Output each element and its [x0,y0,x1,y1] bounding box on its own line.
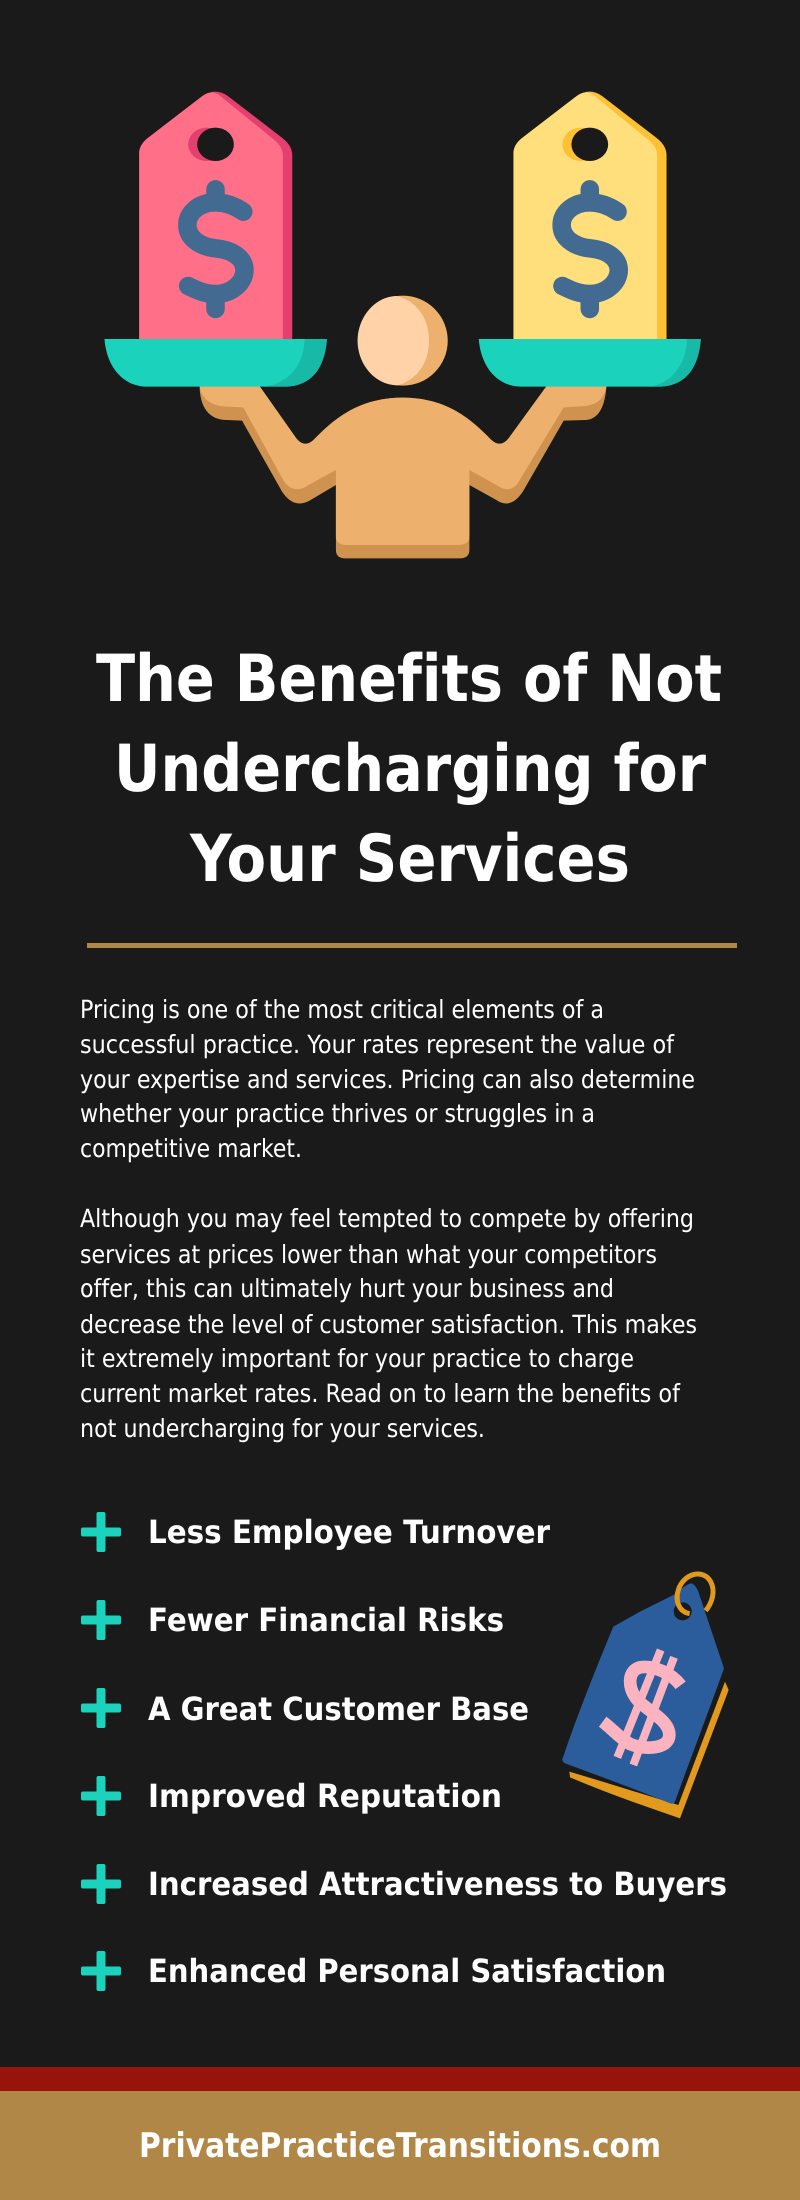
intro paragraph 2: services at prices lower than what your competitors [80,1240,657,1269]
intro paragraph 1: successful practice. Your rates represent the value of [80,1030,675,1059]
person: body and arms [200,385,607,558]
intro paragraph 1: competitive market. [80,1134,302,1163]
intro paragraph 2: offer, this can ultimately hurt your business and [80,1274,614,1303]
intro paragraph 1: Pricing is one of the most critical elements of a [80,995,604,1024]
intro paragraph 2: not undercharging for your services. [80,1414,485,1443]
title: Undercharging for [114,732,706,807]
intro paragraph 2: it extremely important for your practice to charge [80,1344,634,1373]
benefit 1: Less Employee Turnover [148,1513,550,1551]
benefit 3: A Great Customer Base [148,1690,529,1728]
benefit 4: Improved Reputation [148,1777,502,1815]
illustration: person balancing two price tags [104,92,701,558]
benefit 6: Enhanced Personal Satisfaction [148,1952,666,1990]
intro paragraph 2: Although you may feel tempted to compete by offering [80,1204,694,1233]
intro paragraph 2: decrease the level of customer satisfaction. This makes [80,1310,697,1339]
person: head [358,296,448,386]
benefit 5: Increased Attractiveness to Buyers [148,1865,727,1903]
intro paragraph 1: your expertise and services. Pricing can also determine [80,1065,695,1094]
intro paragraph 1: whether your practice thrives or struggles in a [80,1099,595,1128]
title [96,642,722,897]
footer gold band [0,2091,800,2200]
intro paragraph 2: current market rates. Read on to learn the benefits of [80,1379,681,1408]
title: Your Services [189,822,630,897]
intro paragraph 1 [80,995,695,1163]
icon: pink price tag [139,92,292,340]
title: The Benefits of Not [96,642,722,717]
icon: right tray [479,339,701,387]
icon: blue dollar price tag [562,1574,729,1818]
benefit 2: Fewer Financial Risks [148,1601,504,1639]
icon: left tray [104,339,327,387]
intro paragraph 2 [80,1204,697,1443]
benefits list [81,1512,727,1991]
icon: yellow price tag [513,92,667,340]
footer red band [0,2067,800,2091]
website url: PrivatePracticeTransitions.com [139,2126,661,2166]
